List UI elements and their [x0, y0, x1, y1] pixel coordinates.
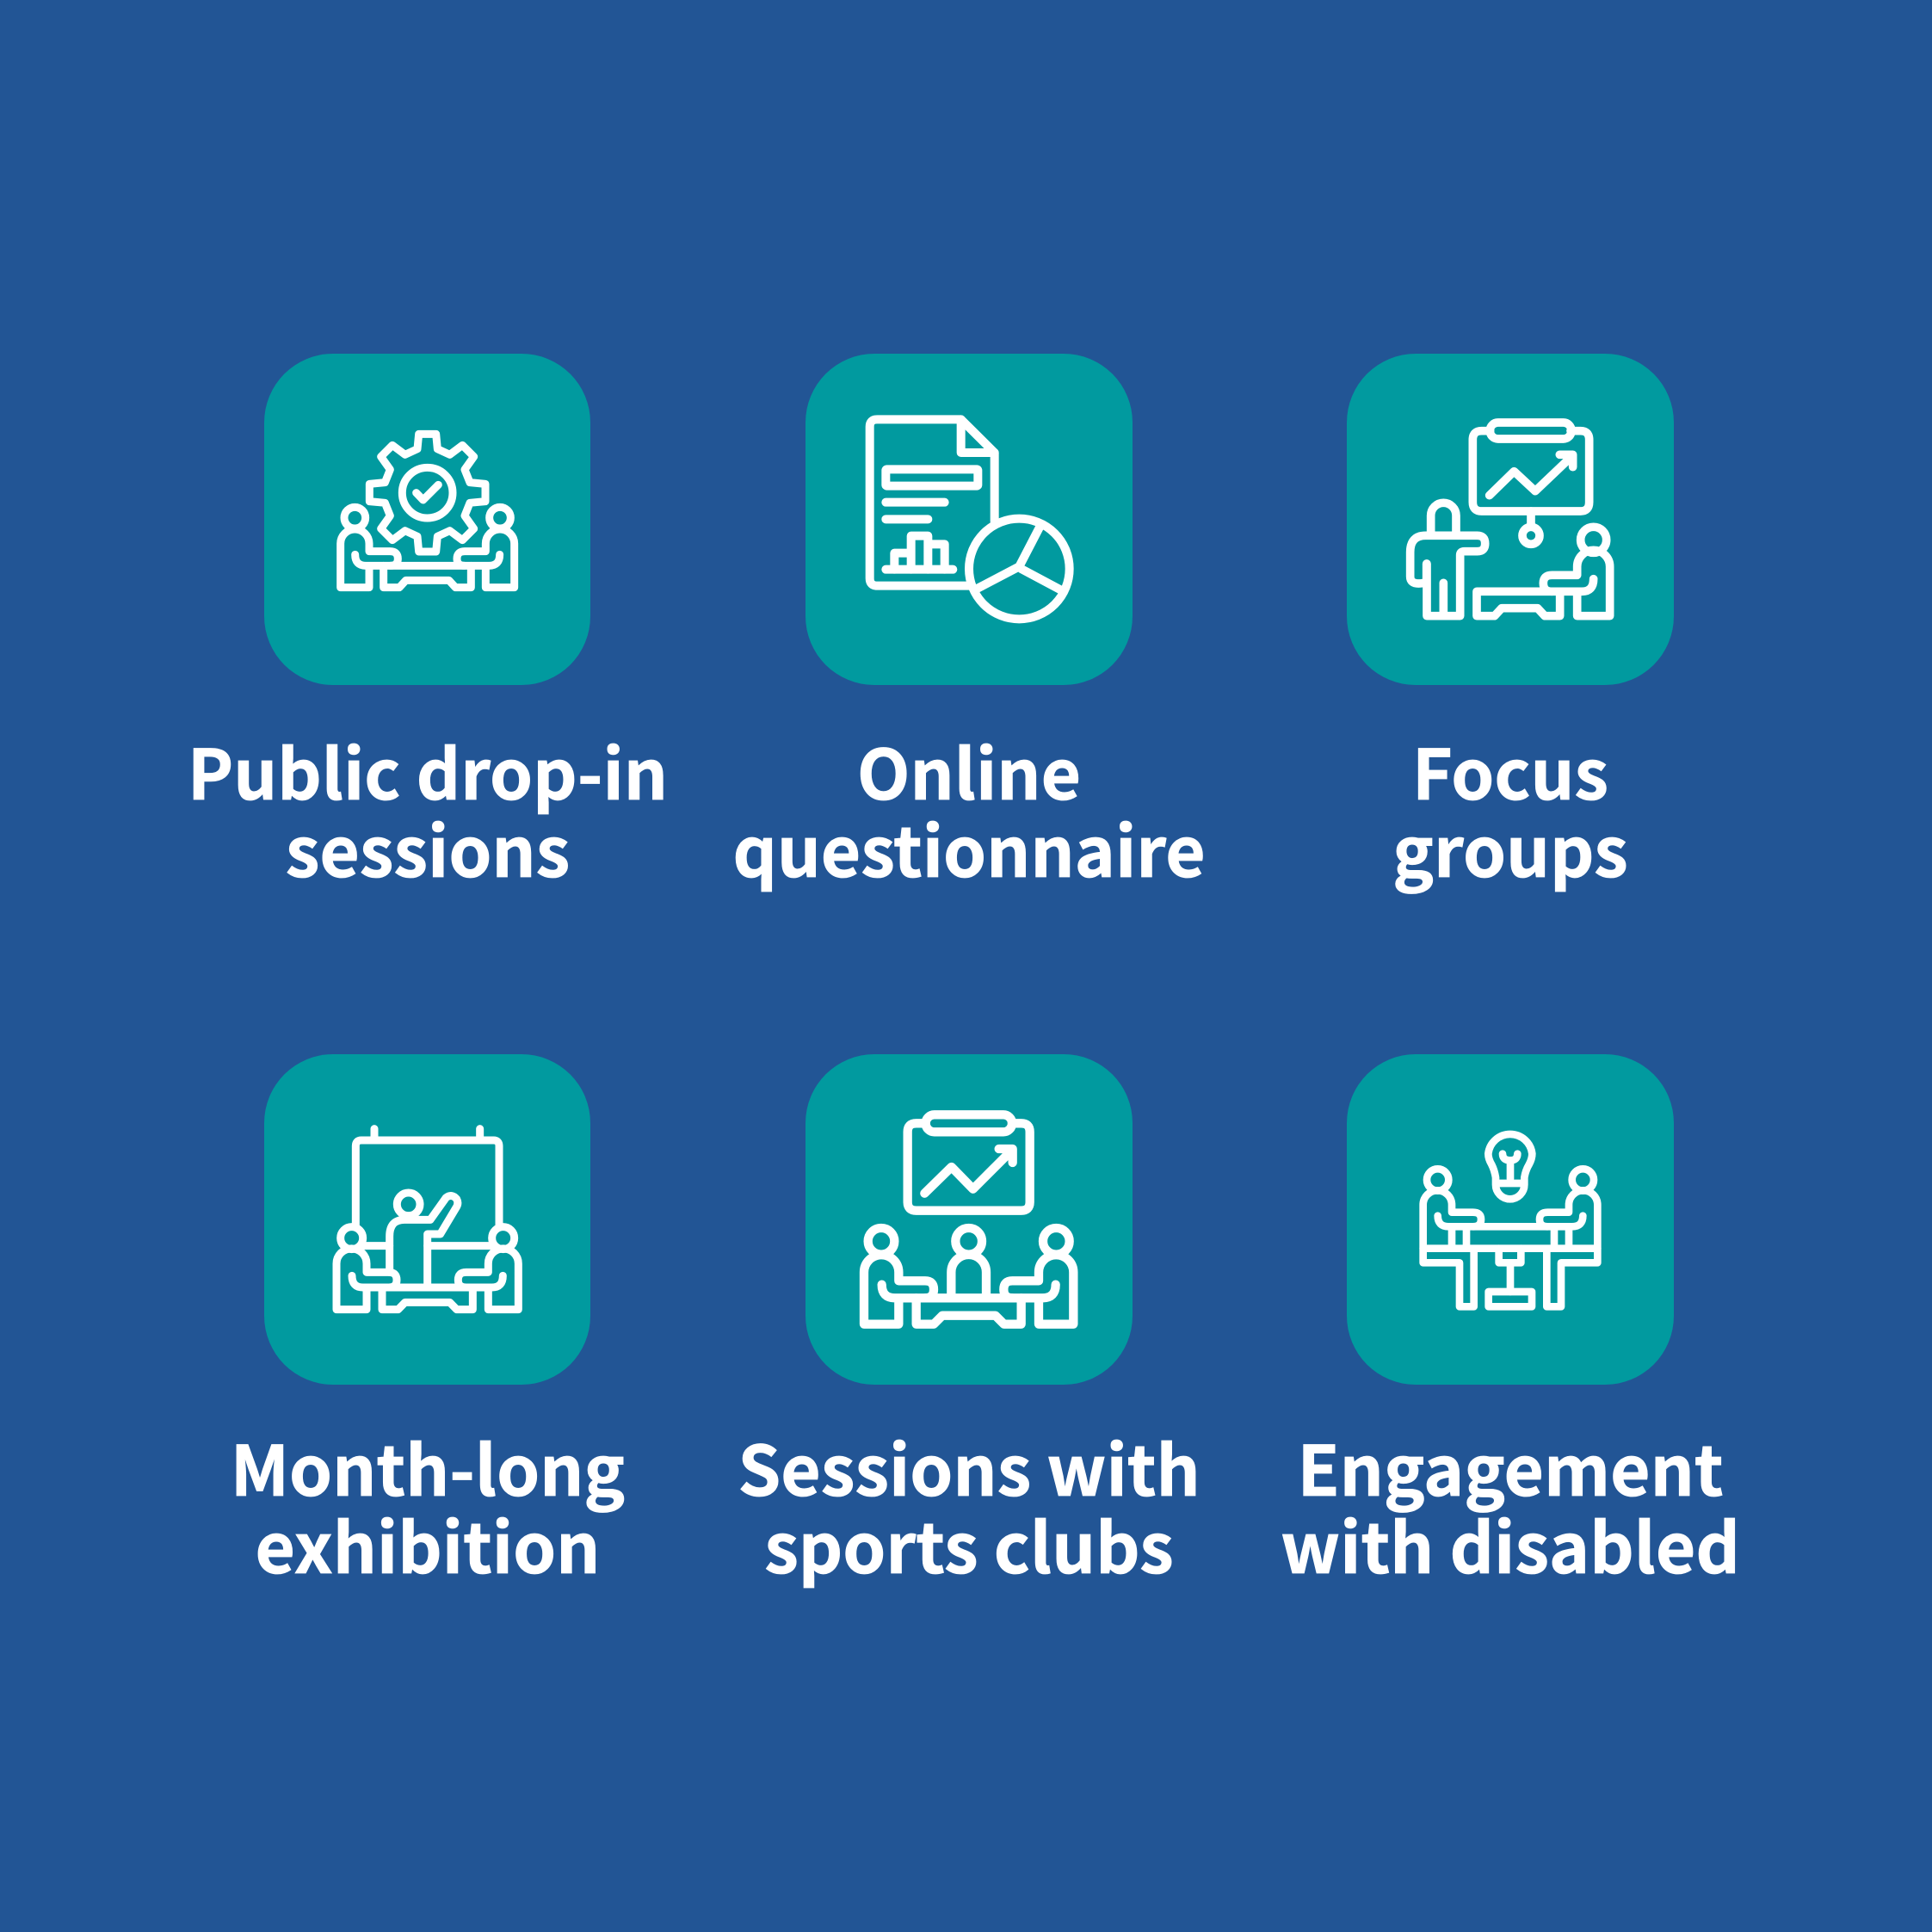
label: Engagement [1297, 1417, 1724, 1516]
panel: focus groups [1347, 354, 1674, 898]
label: sessions [286, 798, 570, 898]
tile [806, 354, 1133, 685]
label: sports clubs [764, 1494, 1174, 1594]
tile [1347, 1054, 1674, 1385]
label: exhibition [256, 1494, 600, 1594]
icon: three people with chart board [864, 1114, 1073, 1324]
label: groups [1392, 798, 1628, 898]
panel: public drop-in sessions [188, 354, 668, 898]
tile [1347, 354, 1674, 685]
label: questionnaire [732, 798, 1206, 898]
icon: two people at table with light bulb [1423, 1134, 1597, 1306]
label: Public drop-in [188, 720, 668, 820]
label: with disabled [1281, 1494, 1740, 1594]
label: Focus [1412, 720, 1608, 820]
tile [806, 1054, 1133, 1385]
panel: sessions with sports clubs [738, 1054, 1201, 1594]
icon: gear with two people at a table [341, 434, 515, 588]
panel: engagement with disabled [1281, 1054, 1740, 1594]
tile [264, 354, 590, 685]
tile [264, 1054, 590, 1385]
label: Online [857, 720, 1081, 820]
panel: month-long exhibition [231, 1054, 625, 1594]
icon: presenter with chart board [1410, 423, 1610, 616]
label: Month-long [231, 1417, 625, 1516]
label: Sessions with [738, 1417, 1201, 1516]
panel: online questionnaire [732, 354, 1206, 898]
icon: exhibition board with presenter [336, 1129, 518, 1310]
icon: document with pie chart [870, 419, 1070, 619]
